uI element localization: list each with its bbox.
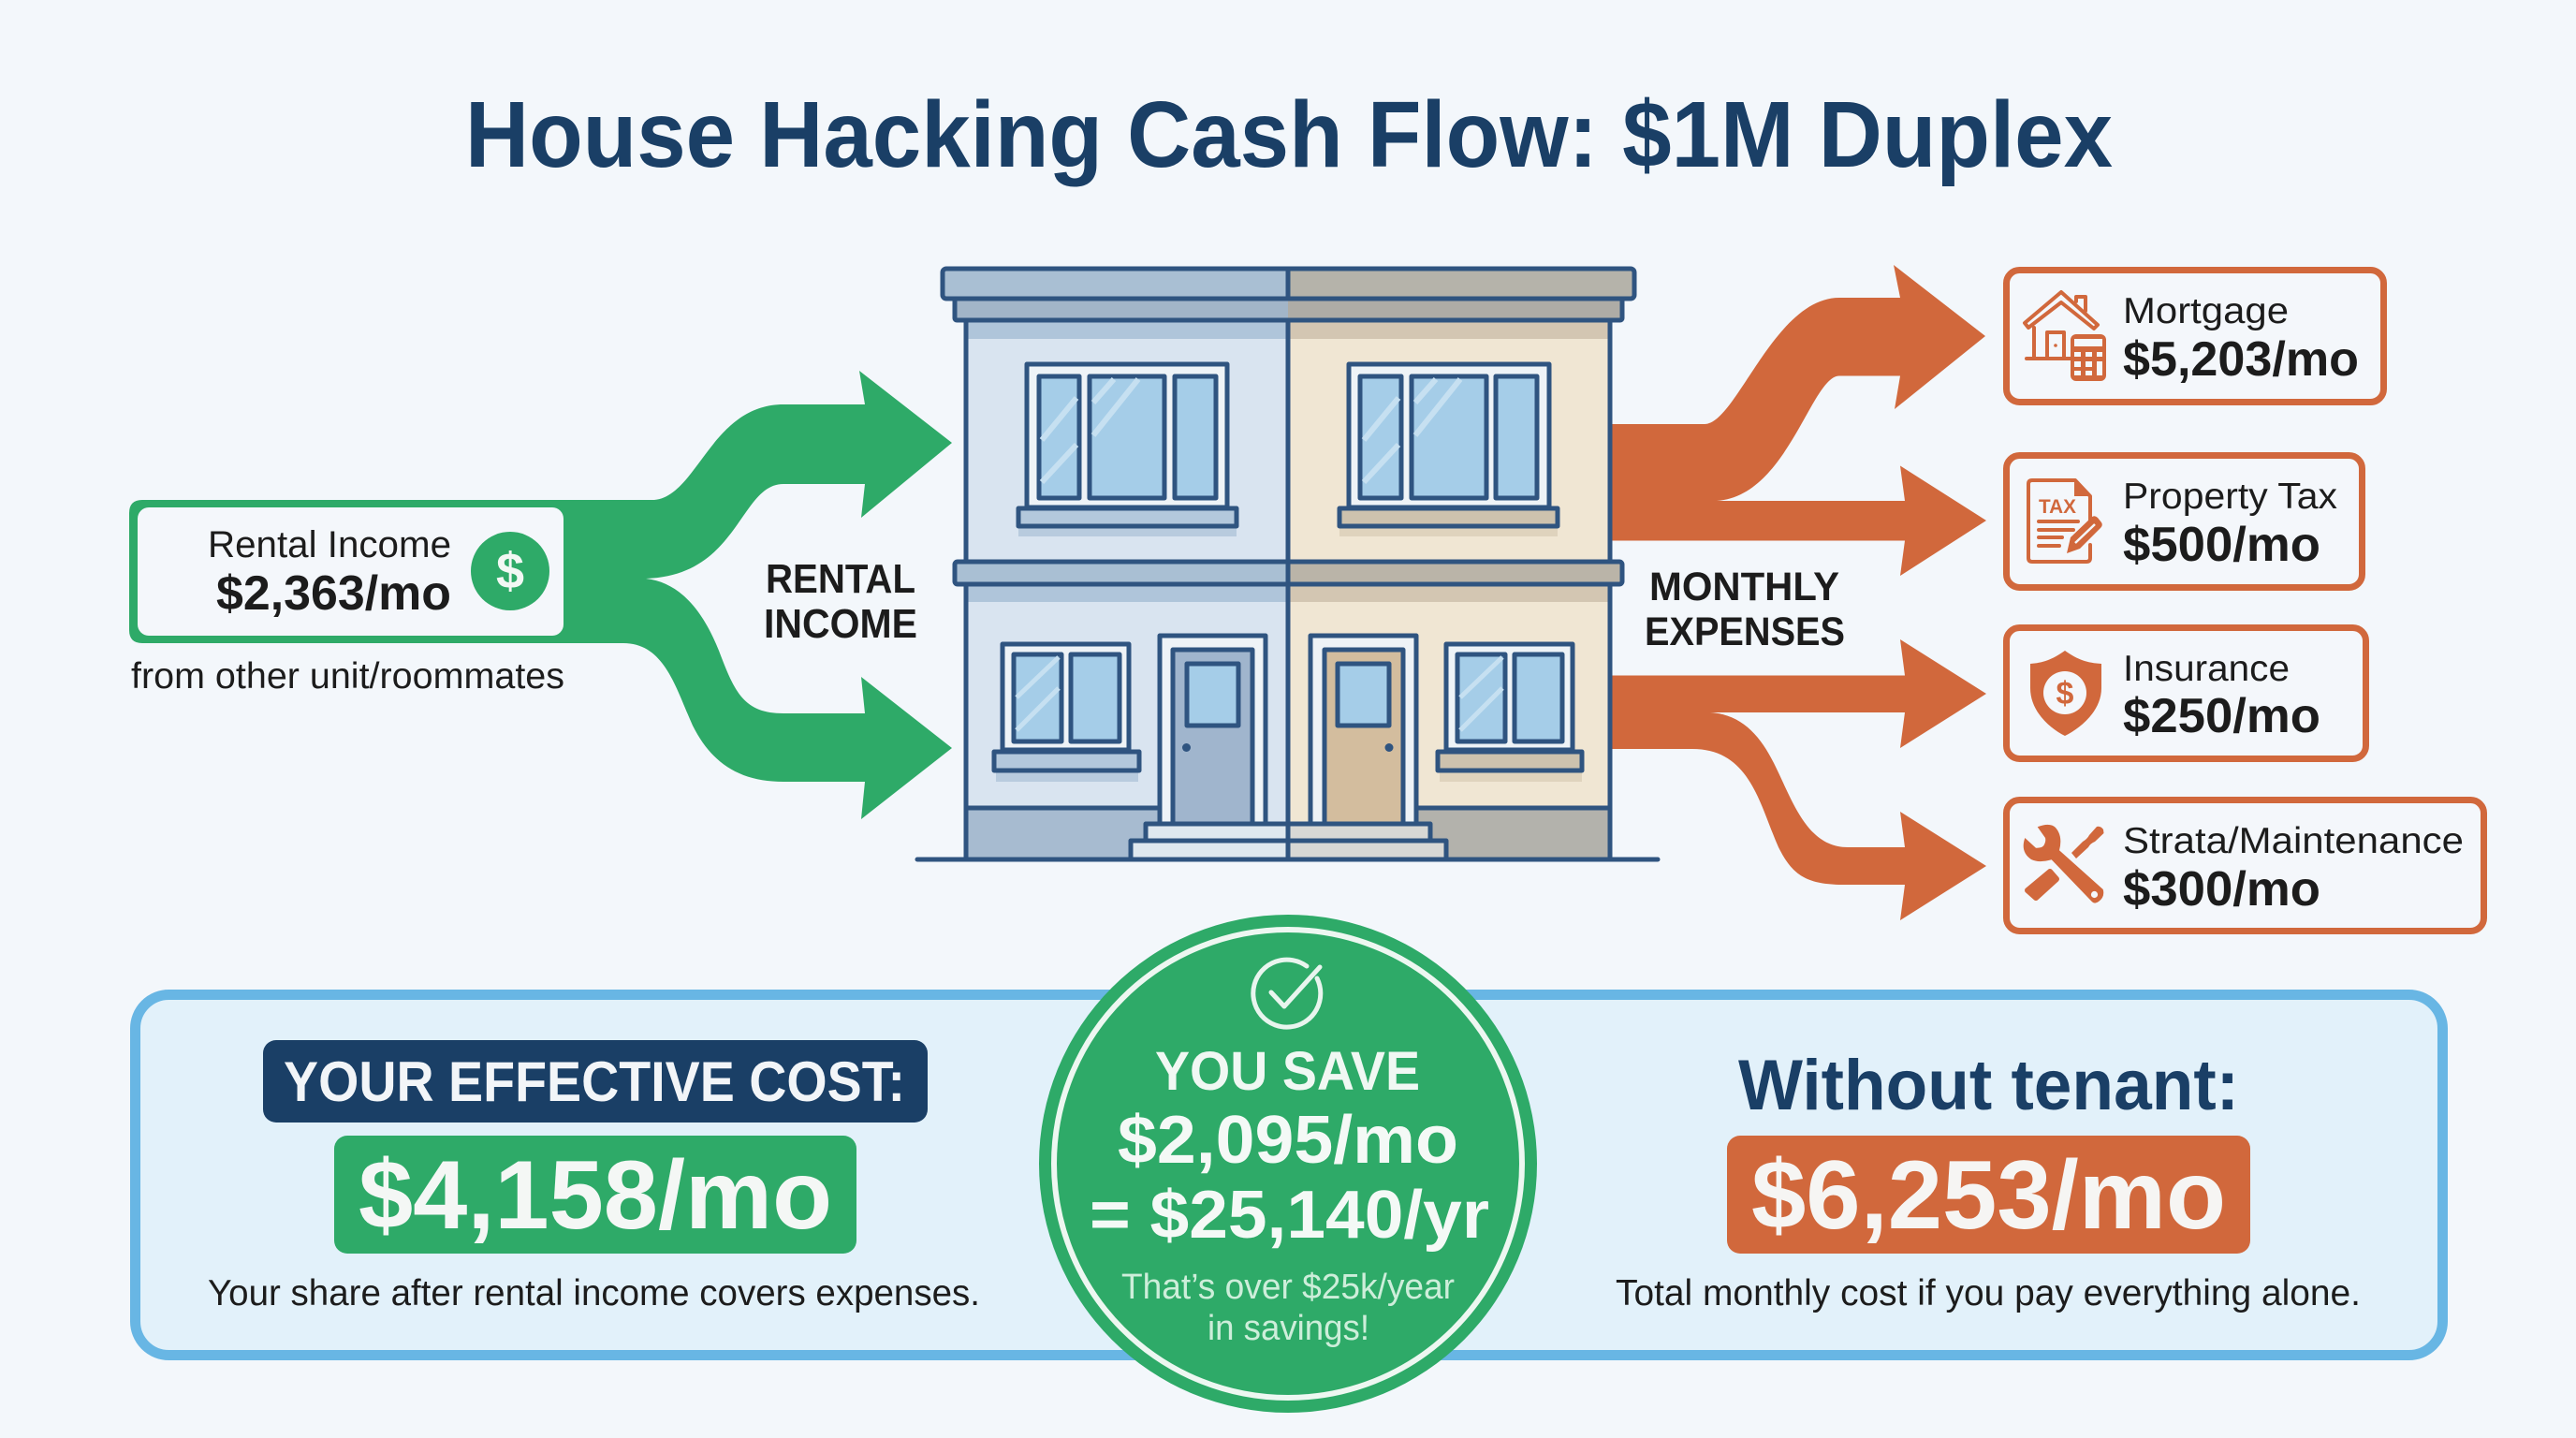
label: rental income: [764, 556, 917, 647]
heading: your effective cost: YOUR EFFECTIVE COST:: [284, 1050, 905, 1113]
panel: strata and maintenance: [2007, 800, 2484, 931]
icon: wrench and screwdriver: [2024, 825, 2104, 903]
icon: shield with dollar: $: [2056, 676, 2074, 712]
icon: tax document and pencil: [2028, 480, 2102, 562]
savings note: in savings!: [1208, 1309, 1369, 1348]
icon: check mark: [1253, 960, 1321, 1027]
strata label: Strata/Maintenance: [2123, 821, 2464, 861]
arrow: orange monthly expense flows (insurance and strata): [1612, 639, 1986, 920]
icon: dollar coin: $: [496, 543, 524, 599]
insurance amount: $250/mo: [2123, 689, 2320, 743]
roof: [943, 268, 1634, 320]
icon: dollar coin: [471, 532, 549, 610]
panel: mortgage: [2007, 270, 2383, 403]
heading: without tenant: Without tenant:: [1738, 1046, 2239, 1125]
panel: rental income card: [138, 507, 564, 636]
monthly savings: $2,095/mo: [1118, 1103, 1458, 1178]
wall: left unit: [966, 319, 1288, 859]
icon: shield with dollar: [2030, 651, 2101, 736]
icon: house and calculator: [2025, 292, 2106, 381]
insurance label: Insurance: [2123, 649, 2290, 689]
effective cost note: Your share after rental income covers expenses.: [208, 1273, 980, 1313]
floor band: [955, 562, 1622, 584]
property tax amount: $500/mo: [2123, 518, 2320, 572]
property tax label: Property Tax: [2123, 477, 2338, 517]
effective cost amount: $4,158/mo: [359, 1141, 832, 1250]
yearly savings: = $25,140/yr: [1090, 1178, 1489, 1253]
label: rental income: INCOME: [764, 601, 917, 647]
window: lower right: [1438, 644, 1582, 782]
rental income label: Rental Income: [208, 524, 451, 565]
door: right unit: [1310, 636, 1416, 825]
icon: tax document and pencil: TAX: [2039, 496, 2076, 518]
label: monthly expenses: MONTHLY: [1649, 565, 1839, 609]
savings note: That’s over $25k/year: [1121, 1268, 1455, 1307]
front steps: [1131, 824, 1446, 859]
arrow: orange monthly expense flows (mortgage and property tax): [1612, 265, 1986, 576]
panel: property tax: [2007, 455, 2363, 588]
label: monthly expenses: [1645, 565, 1845, 654]
you save heading: YOU SAVE: [1155, 1041, 1420, 1102]
strata amount: $300/mo: [2123, 862, 2320, 917]
ground line: [917, 858, 1658, 861]
rental income amount: $2,363/mo: [216, 566, 451, 621]
arrow: green rental income flow: [129, 371, 952, 819]
rental income source note: from other unit/roommates: [131, 656, 564, 697]
label: rental income: RENTAL: [766, 556, 915, 602]
without tenant note: Total monthly cost if you pay everything alone.: [1616, 1273, 2361, 1313]
panel: cost comparison: [135, 994, 2443, 1356]
window: upper right: [1339, 364, 1558, 536]
window: upper left: [1018, 364, 1237, 536]
without tenant amount: $6,253/mo: [1751, 1141, 2226, 1250]
mortgage amount: $5,203/mo: [2123, 332, 2359, 387]
duplex building: [917, 268, 1658, 859]
title: House Hacking Cash Flow: $1M Duplex: [465, 82, 2113, 187]
window: lower left: [994, 644, 1139, 782]
wall: right unit: [1288, 319, 1610, 859]
savings note: [1121, 1268, 1455, 1348]
savings badge: [1039, 915, 1537, 1413]
panel: insurance: [2007, 627, 2366, 758]
mortgage label: Mortgage: [2123, 291, 2289, 331]
label: monthly expenses: EXPENSES: [1645, 609, 1845, 654]
door: left unit: [1160, 636, 1266, 825]
